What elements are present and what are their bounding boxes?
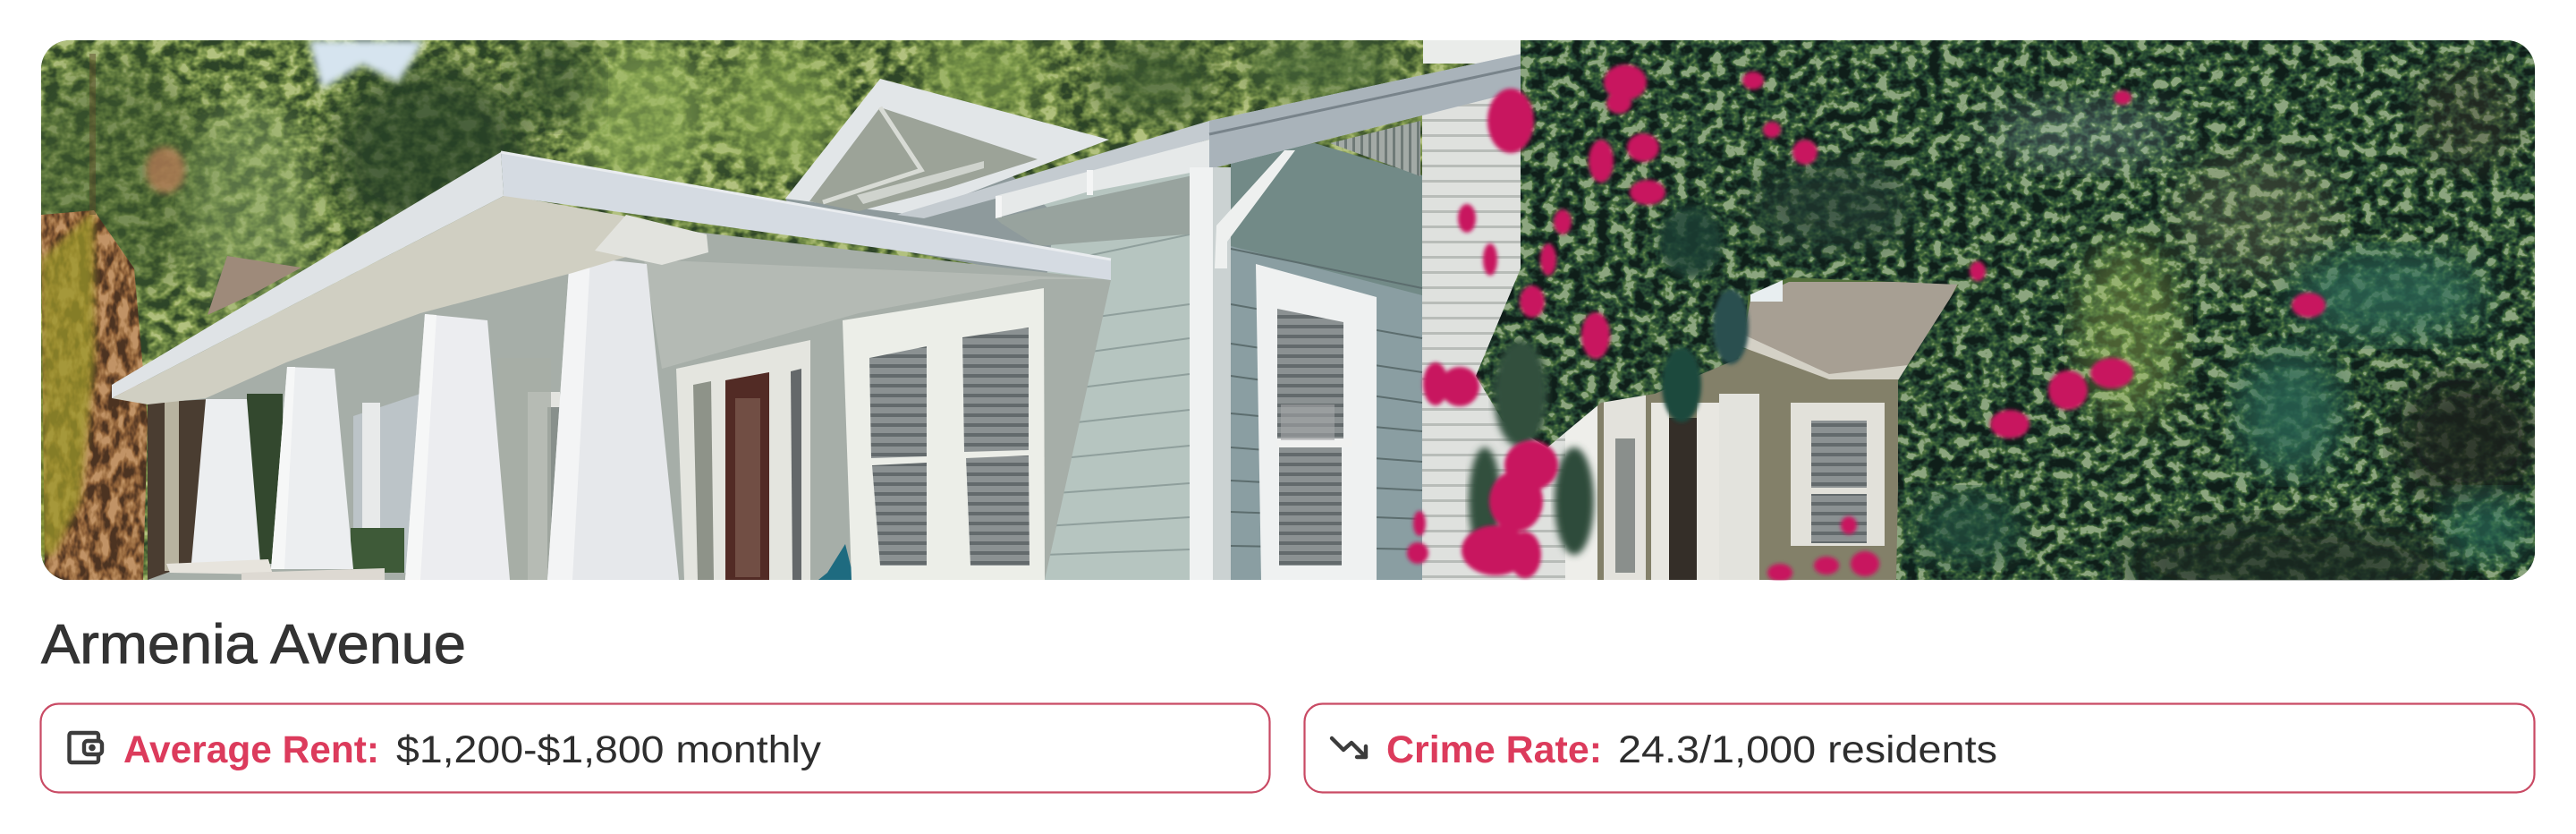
- neighbouring roof at left: [208, 256, 301, 315]
- label: crime rate: Crime Rate:: [1386, 728, 1602, 771]
- porch columns: [166, 256, 679, 580]
- upper gable: [785, 79, 1109, 215]
- card: average rent: [41, 703, 1270, 793]
- main porch roof: [112, 152, 1111, 404]
- porch door and sidelights: [676, 340, 854, 580]
- photo: craftsman bungalow with bougainvillea: [18, 36, 2540, 608]
- sky gap: [309, 40, 425, 89]
- side window with blinds: [1256, 264, 1377, 580]
- icon: trending down arrow: [1332, 738, 1366, 757]
- house behind the flowers: [1592, 268, 1959, 580]
- left palm fronds: [41, 54, 185, 580]
- front siding wall: [1044, 142, 1199, 580]
- card: crime rate: [1304, 703, 2535, 793]
- shaded wall under the gable: [785, 176, 1052, 273]
- magenta flower clusters: [1407, 64, 2326, 582]
- value: rent range: $1,200-$1,800 monthly: [396, 728, 822, 771]
- corner post and bracket: [1190, 150, 1295, 580]
- bougainvillea foliage mass: [1469, 40, 2540, 608]
- double window with blinds: [843, 288, 1045, 580]
- tree canopy behind the house: [18, 36, 2535, 580]
- white brick chimney wall: [1422, 40, 1597, 580]
- value: crime rate figure: 24.3/1,000 residents: [1618, 728, 1997, 771]
- dark blue-grey side wall: [1231, 121, 1422, 580]
- label: average rent: Average Rent:: [123, 728, 379, 771]
- upper roof eave: [898, 54, 1521, 245]
- title: Armenia Avenue: [41, 614, 466, 676]
- porch interior: [148, 224, 1111, 580]
- icon: wallet: [70, 733, 102, 762]
